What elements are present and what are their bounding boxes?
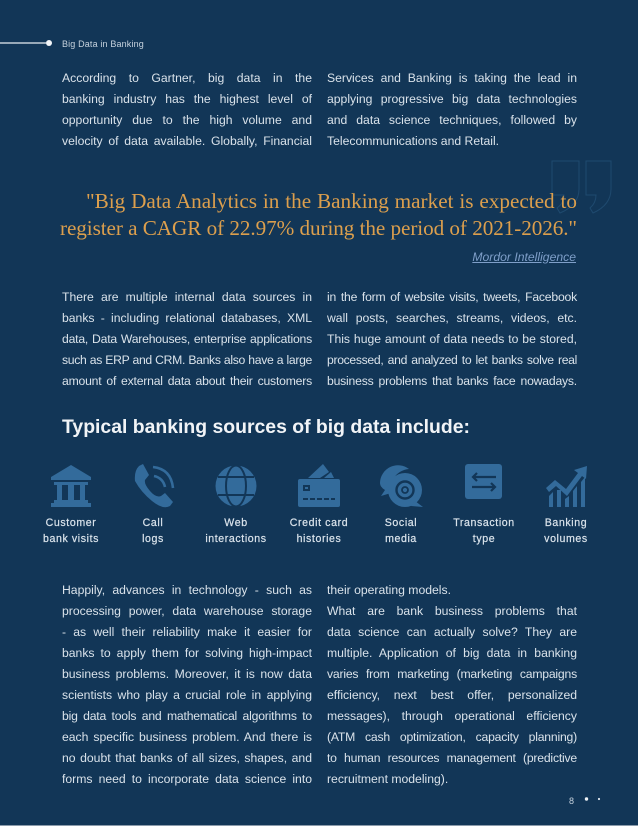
- closing text right column: What are bank business problems that: [327, 604, 577, 618]
- page dots: [584, 797, 600, 801]
- closing text right column: messages), through operational efficiency: [327, 709, 577, 723]
- label: call logs: logs: [142, 533, 164, 545]
- label: banking volumes: volumes: [544, 533, 588, 545]
- intro text left column: banking industry has the highest level of: [62, 92, 312, 106]
- intro text left column: [62, 71, 312, 148]
- second text left column: such as ERP and CRM. Banks also have a large: [62, 353, 312, 367]
- header rule with dot: [0, 40, 52, 46]
- closing text right column: [327, 583, 577, 786]
- second text right column: in the form of website visits, tweets, Facebook: [327, 290, 577, 304]
- label: customer bank visits: Customer: [46, 517, 96, 529]
- second text left column: [62, 290, 312, 388]
- label: web interactions: [205, 517, 267, 545]
- closing text right column: data science can actually solve? They are: [327, 625, 577, 639]
- label: social media: [385, 517, 417, 545]
- icon: globe: [216, 466, 256, 506]
- label: banking volumes: Banking: [545, 517, 587, 529]
- intro text right column: Telecommunications and Retail.: [327, 134, 499, 148]
- label: social media: media: [385, 533, 417, 545]
- closing text left column: banks to apply them for solving high-impact: [62, 646, 312, 660]
- icon: bank: [51, 465, 91, 507]
- label: customer bank visits: bank visits: [43, 533, 99, 545]
- label: credit card histories: [290, 517, 348, 545]
- icon: quotation mark outline: [552, 160, 612, 214]
- closing text left column: Happily, advances in technology - such as: [62, 583, 312, 597]
- label: customer bank visits: [43, 517, 99, 545]
- bottom edge: [0, 825, 638, 826]
- icon: credit card: [298, 464, 340, 507]
- quote: [60, 189, 577, 240]
- closing text left column: each specific business problem. And there is: [62, 730, 312, 744]
- second text right column: This huge amount of data needs to be stored,: [327, 332, 577, 346]
- closing text right column: multiple. Application of big data in banking: [327, 646, 577, 660]
- closing text left column: forms need to incorporate data science into: [62, 772, 312, 786]
- second text right column: wall posts, searches, streams, videos, etc.: [327, 311, 577, 325]
- closing text left column: processing power, data warehouse storage: [62, 604, 312, 618]
- label: credit card histories: histories: [297, 533, 341, 545]
- closing text right column: their operating models.: [327, 583, 451, 597]
- closing text left column: business problems. Moreover, it is now data: [62, 667, 312, 681]
- page number: 8: [569, 796, 574, 806]
- closing text left column: [62, 583, 312, 786]
- label: web interactions: interactions: [205, 533, 267, 545]
- second text left column: data, Data Warehouses, enterprise applications: [62, 332, 312, 346]
- label: credit card histories: Credit card: [290, 517, 348, 529]
- closing text right column: efficiency, next best offer, personalized: [327, 688, 577, 702]
- quote: "Big Data Analytics in the Banking market is expected to: [86, 189, 577, 213]
- label: call logs: Call: [143, 517, 163, 529]
- intro text right column: and data science techniques, followed by: [327, 113, 577, 127]
- label: transaction type: type: [473, 533, 495, 545]
- label: call logs: [142, 517, 164, 545]
- label: transaction type: [453, 517, 515, 545]
- closing text right column: recruitment modeling).: [327, 772, 448, 786]
- second text right column: business problems that banks face nowadays.: [327, 374, 577, 388]
- icon: phone: [134, 464, 174, 508]
- closing text left column: big data tools and mathematical algorithms to: [62, 709, 312, 723]
- intro text right column: [327, 71, 577, 148]
- closing text left column: no doubt that banks of all sizes, shapes, and: [62, 751, 312, 765]
- quote source link: Mordor Intelligence: [472, 250, 576, 264]
- second text left column: There are multiple internal data sources in: [62, 290, 312, 304]
- closing text left column: - as well their reliability make it easier for: [62, 625, 312, 639]
- intro text left column: velocity of data available. Globally, Financial: [62, 134, 312, 148]
- label: transaction type: Transaction: [453, 517, 515, 529]
- second text left column: banks - including relational databases, XML: [62, 311, 312, 325]
- label: banking volumes: [544, 517, 588, 545]
- icon: social media: [380, 465, 423, 507]
- label: social media: Social: [385, 517, 417, 529]
- second text right column: [327, 290, 578, 388]
- label: web interactions: Web: [224, 517, 248, 529]
- intro text right column: applying progressive big data technologies: [327, 92, 577, 106]
- closing text right column: varies from marketing (marketing campaigns: [327, 667, 577, 681]
- quote: register a CAGR of 22.97% during the period of 2021-2026.": [60, 216, 577, 240]
- second text right column: processed, and analyzed to let banks solve real: [327, 353, 577, 367]
- closing text right column: (ATM cash optimization, capacity planning): [327, 730, 577, 744]
- intro text left column: opportunity due to the high volume and: [62, 113, 312, 127]
- closing text right column: to human resources management (predictive: [327, 751, 577, 765]
- icon: growth chart: [546, 466, 587, 507]
- icon: transaction arrows: [465, 464, 502, 499]
- intro text left column: According to Gartner, big data in the: [62, 71, 312, 85]
- page header title: Big Data in Banking: [62, 39, 144, 49]
- intro text right column: Services and Banking is taking the lead in: [327, 71, 577, 85]
- section heading: Typical banking sources of big data include:: [62, 416, 470, 438]
- second text left column: amount of external data about their customers: [62, 374, 312, 388]
- closing text left column: scientists who play a crucial role in applying: [62, 688, 312, 702]
